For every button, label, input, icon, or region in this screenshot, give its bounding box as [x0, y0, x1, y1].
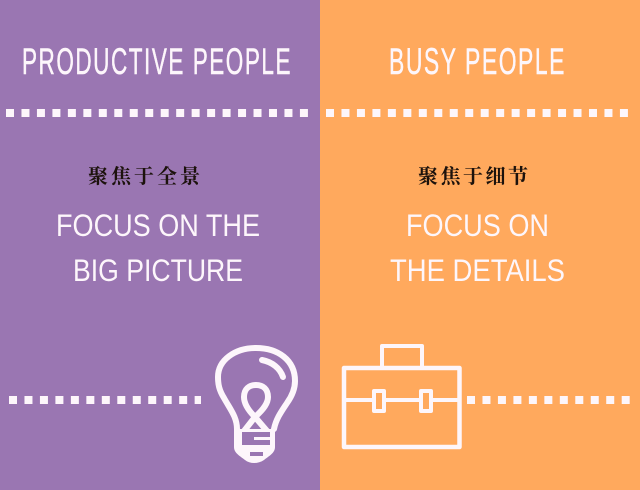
panel: productive people: [0, 0, 320, 490]
text: focus on the details: THE DETAILS: [390, 252, 565, 288]
chinese caption: right: 聚焦于细节: [418, 160, 528, 189]
dotted divider: left top: [6, 109, 309, 117]
icon: light bulb: [218, 348, 295, 463]
dotted line: left bottom: [9, 396, 201, 404]
panel: busy people: [320, 0, 640, 490]
heading: productive people: PRODUCTIVE PEOPLE: [22, 41, 292, 82]
text: focus on the details: [390, 207, 565, 288]
dotted divider: right top: [326, 109, 634, 117]
icon: briefcase: [344, 346, 460, 447]
text: focus on the big picture: BIG PICTURE: [73, 252, 243, 288]
chinese caption: left: 聚焦于全景: [88, 160, 201, 189]
text: focus on the big picture: FOCUS ON THE: [56, 207, 260, 243]
dotted line: right bottom: [467, 396, 635, 404]
text: focus on the details: FOCUS ON: [406, 207, 549, 243]
text: focus on the big picture: [56, 207, 260, 288]
